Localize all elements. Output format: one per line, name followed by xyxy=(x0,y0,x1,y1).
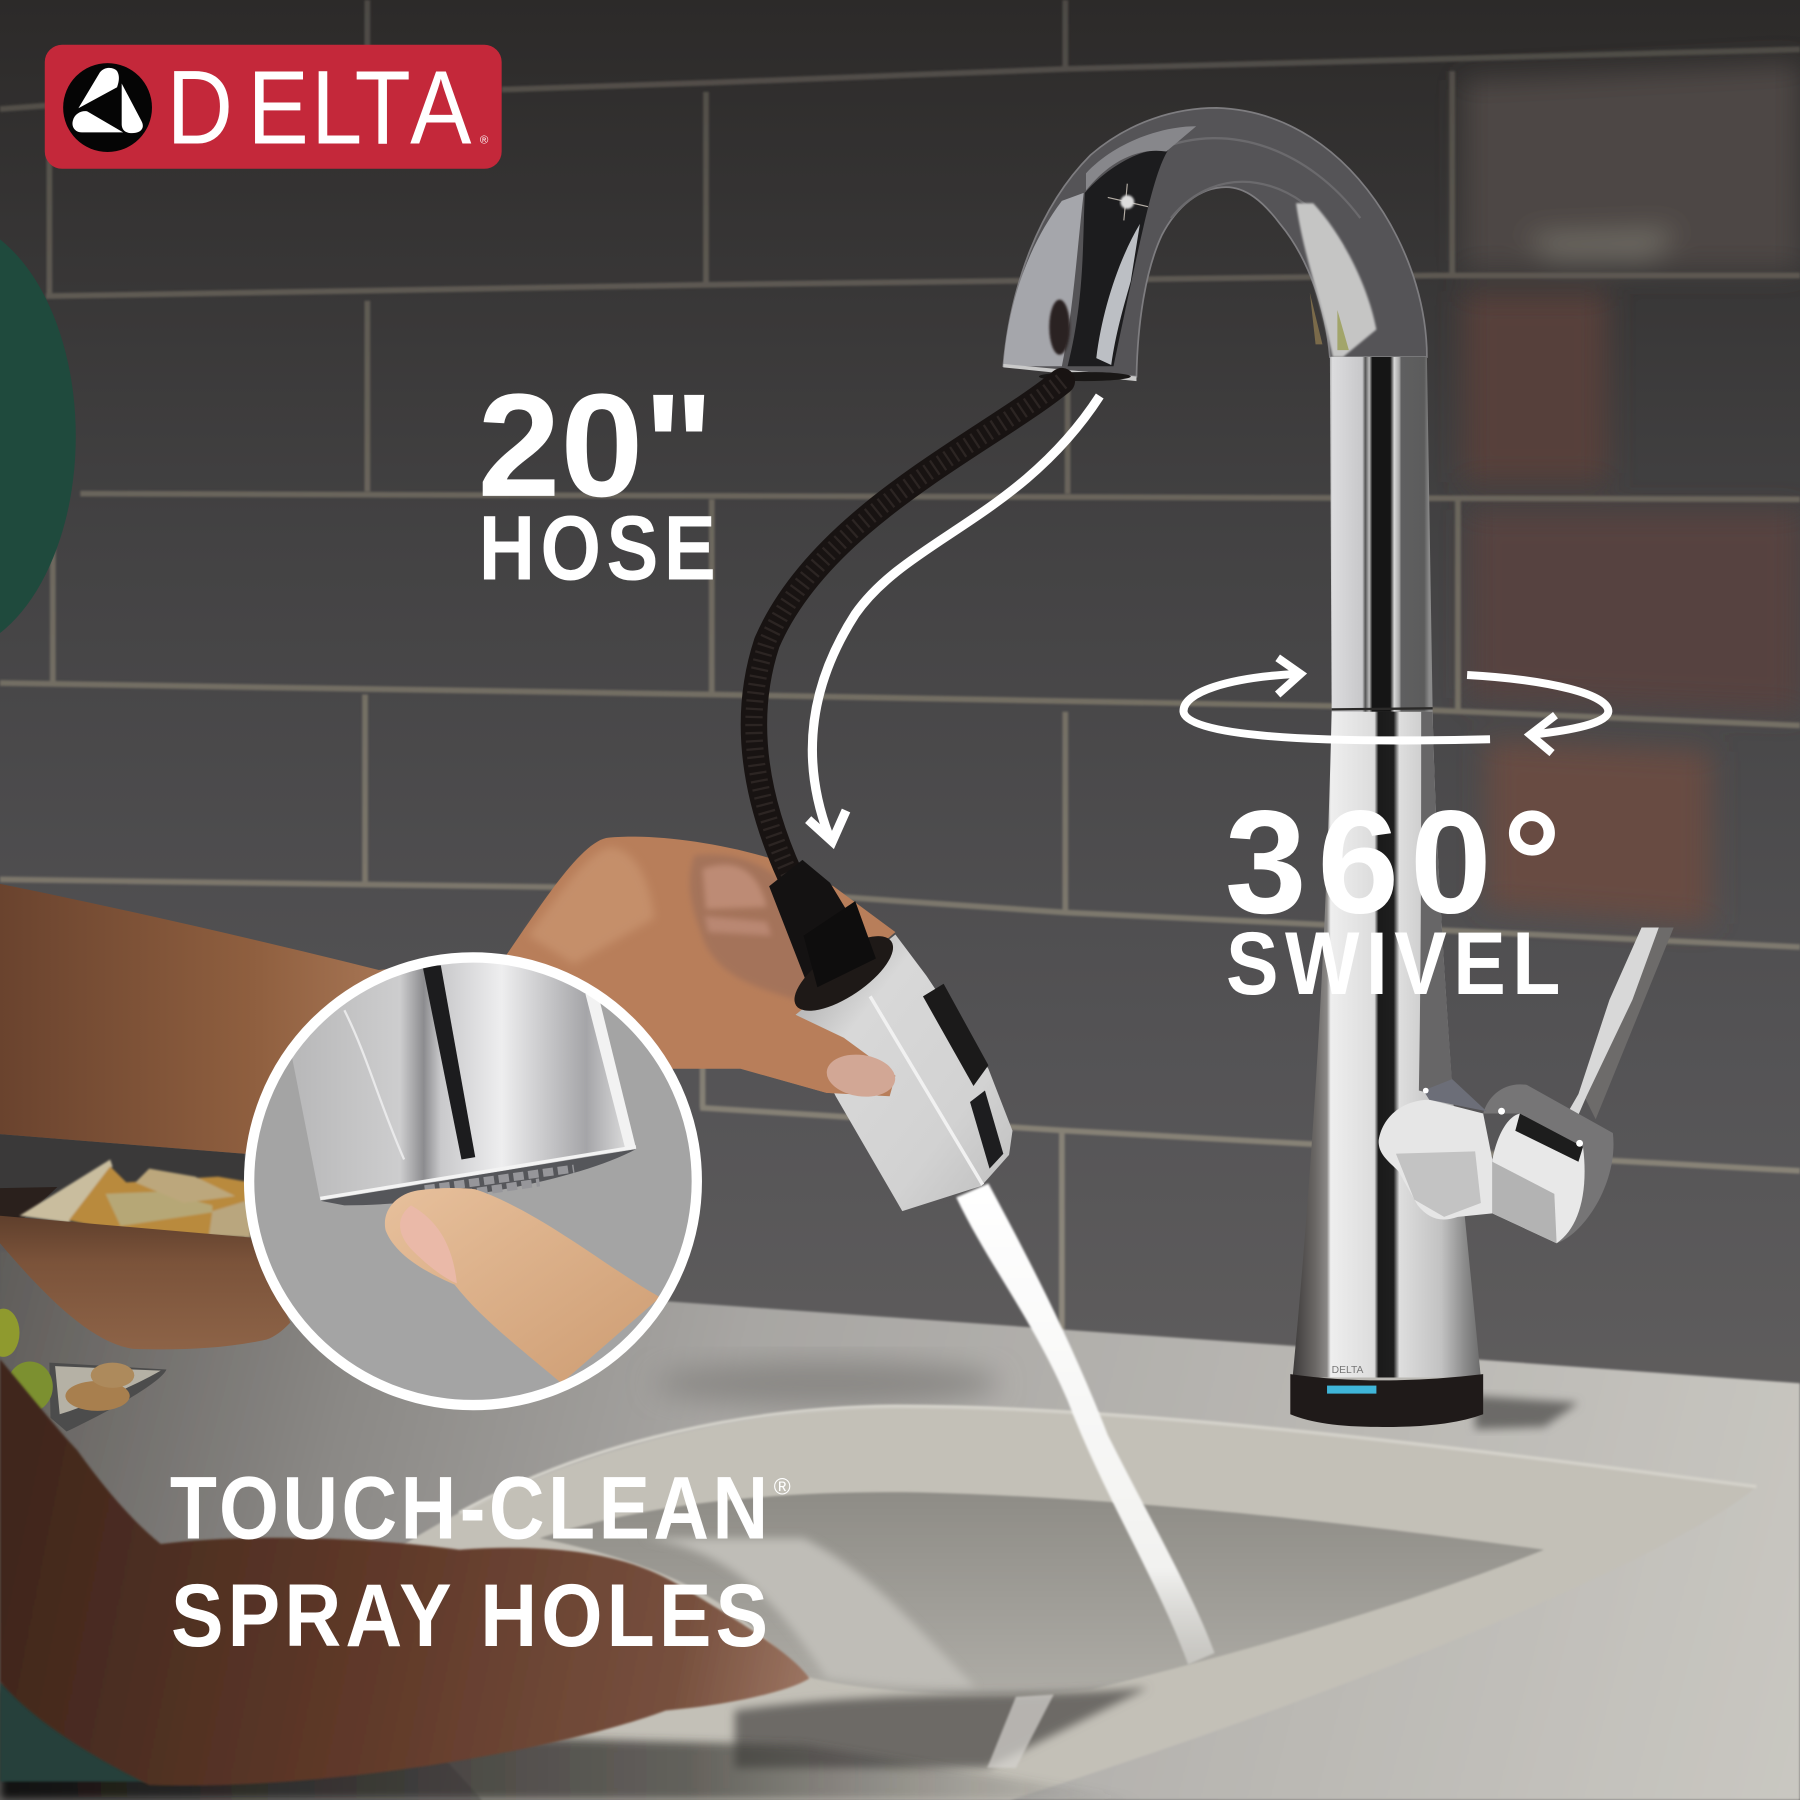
label: touch-clean spray holes: ® xyxy=(774,1474,791,1500)
sprayer head xyxy=(796,934,1012,1211)
faucet brand mark: DELTA xyxy=(1332,1365,1363,1376)
logo emblem xyxy=(63,63,152,152)
forearm xyxy=(0,884,506,1154)
cylinder lower xyxy=(1492,1162,1557,1243)
bowl back xyxy=(0,1187,57,1219)
small plate xyxy=(49,1363,166,1432)
sparkle on spout xyxy=(1108,184,1148,220)
valve top reflection xyxy=(1423,1079,1487,1111)
gooseneck arch xyxy=(1003,108,1427,377)
bowl xyxy=(0,1216,290,1349)
edge stripe xyxy=(585,990,636,1150)
hose length arrow xyxy=(808,396,1100,841)
swivel arrows xyxy=(1184,658,1608,753)
registered mark: ® xyxy=(480,134,489,146)
faucet body xyxy=(1293,712,1481,1378)
bowl of food xyxy=(0,1134,290,1432)
cylinder dark band xyxy=(1515,1114,1583,1162)
label: 20 inch hose xyxy=(478,364,716,600)
hose connector xyxy=(769,860,876,990)
sprayer collar xyxy=(783,922,904,1025)
fingernail xyxy=(400,1205,457,1283)
inset: touch-clean spray holes xyxy=(249,947,697,1405)
logo wordmark: DELTA xyxy=(167,49,472,166)
sink basin xyxy=(540,1492,1544,1694)
nozzle mouth xyxy=(1003,364,1136,381)
counter shadow above sink xyxy=(654,1360,999,1406)
water stream xyxy=(956,1184,1215,1665)
sprayer button xyxy=(923,984,988,1086)
hose xyxy=(754,381,1062,875)
basin highlight xyxy=(643,1538,976,1688)
logo badge xyxy=(45,45,502,169)
nozzle reflection dark xyxy=(1068,149,1169,366)
green ball at left edge xyxy=(0,218,76,654)
inset background xyxy=(249,957,697,1405)
swivel seam xyxy=(1332,708,1433,709)
pull-down sprayer xyxy=(735,860,1012,1211)
label: touch-clean spray holes: SPRAY HOLES xyxy=(171,1565,768,1665)
faucet shadow xyxy=(1475,1396,1578,1429)
dark foreground vignette xyxy=(0,1682,1148,1800)
hand back xyxy=(482,837,895,1102)
sprayer right face dark reflection xyxy=(970,1091,1003,1169)
indicator light xyxy=(1327,1386,1376,1394)
lower hand xyxy=(0,1359,809,1786)
sink xyxy=(321,1406,1756,1800)
sprayer edge highlight xyxy=(870,996,983,1185)
handle lever xyxy=(1566,928,1674,1123)
teal sleeve bottom left xyxy=(0,1682,149,1782)
arch inner contour lines xyxy=(1159,138,1360,247)
connector over collar xyxy=(804,901,876,987)
inset ring xyxy=(249,957,697,1405)
handle translucent collar xyxy=(1483,1084,1614,1243)
label: 360 degree swivel: SWIVEL xyxy=(1226,913,1560,1013)
nozzle reflection light xyxy=(1003,193,1084,366)
forearm and holding hand xyxy=(0,837,895,1154)
thumb nail xyxy=(824,1050,898,1101)
translucent body right xyxy=(1419,712,1453,1100)
back of hand highlight xyxy=(528,847,654,964)
label: touch-clean spray holes xyxy=(170,1457,791,1665)
label: 20 inch hose: 20" xyxy=(478,364,714,528)
spray face xyxy=(320,1149,636,1205)
water reflection xyxy=(987,1694,1054,1768)
thumb over sprayer xyxy=(735,1015,895,1096)
nozzle top rim xyxy=(1086,126,1196,191)
handle cylinder xyxy=(1492,1114,1585,1243)
grapes xyxy=(0,1309,20,1357)
wall gap above bowl xyxy=(0,1134,245,1240)
valve underside xyxy=(1396,1151,1481,1217)
person reflection xyxy=(1049,300,1070,355)
label: 360 degree swivel: 360° xyxy=(1225,781,1561,945)
finger xyxy=(385,1188,660,1383)
sparkles on handle xyxy=(1423,1088,1583,1147)
reflection on arch xyxy=(1296,203,1376,357)
curled fingers xyxy=(690,854,815,999)
label: touch-clean spray holes: TOUCH-CLEAN xyxy=(170,1457,768,1558)
faucet xyxy=(1003,108,1674,1427)
dark stripe xyxy=(422,965,475,1159)
label: 20 inch hose: HOSE xyxy=(479,498,716,600)
plate food xyxy=(65,1381,130,1411)
Delta logo xyxy=(45,45,502,169)
upper stem xyxy=(1330,357,1433,712)
crack highlight xyxy=(344,1010,404,1159)
spray holes xyxy=(425,1169,574,1196)
nozzle highlight stripe xyxy=(1096,224,1140,365)
countertop xyxy=(0,1251,1800,1800)
sink front shadow xyxy=(735,1688,1148,1768)
base ring black xyxy=(1290,1374,1483,1427)
sink rim xyxy=(321,1406,1756,1800)
handle valve junction xyxy=(1379,1100,1492,1219)
food xyxy=(20,1159,250,1238)
chrome sprayer close-up xyxy=(292,947,636,1201)
